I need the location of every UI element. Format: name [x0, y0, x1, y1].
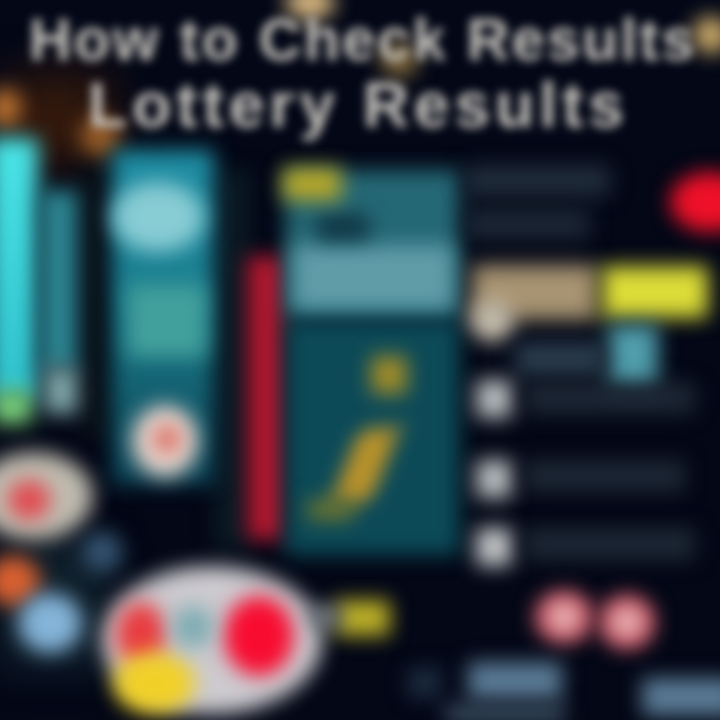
chart dark notch [317, 214, 369, 240]
list row 2 icon [476, 460, 512, 498]
list row 2 text [525, 460, 685, 492]
dot: orange [0, 556, 40, 606]
decorative spark: between title lines [380, 42, 418, 78]
pink dot right [598, 594, 656, 650]
column highlight [112, 182, 204, 252]
donut red centre [8, 480, 50, 520]
tan band light spot [470, 300, 514, 342]
pink dot left [534, 590, 594, 644]
chart upper area [285, 170, 460, 320]
red bar [247, 256, 285, 540]
decorative spark: under title [80, 116, 120, 156]
title: How to Check Results [29, 7, 697, 73]
chart marker [371, 356, 407, 394]
text block: top right second line [465, 208, 590, 240]
cyan bar base [0, 390, 32, 424]
chart light band [293, 245, 453, 310]
panel: teal column [112, 150, 214, 485]
chart lower area [285, 320, 460, 555]
chart curve [330, 428, 400, 504]
text block: top right [465, 165, 610, 197]
caption: bottom small [408, 668, 442, 698]
decorative spark: top [285, 0, 335, 20]
donut: left [0, 452, 93, 540]
background glow: top left [0, 75, 110, 165]
pie red right [224, 596, 294, 676]
column mid block [128, 285, 206, 357]
pie yellow [113, 652, 195, 714]
caption: bottom middle [468, 662, 562, 700]
background haze: lower left [0, 540, 110, 670]
teal bar base [44, 368, 78, 414]
connector [310, 606, 340, 628]
pie red left [116, 602, 166, 668]
decorative spark: left [0, 88, 22, 128]
list row 3 text [525, 528, 695, 560]
dot: small blue [82, 532, 122, 572]
row band [515, 342, 605, 376]
tan band [472, 265, 597, 320]
icon: small pie [132, 405, 198, 477]
background haze: centre gap [215, 170, 250, 550]
caption: bottom right [642, 678, 720, 716]
yellow pie tag [336, 600, 390, 636]
dot: light blue [18, 593, 82, 653]
subtitle: Lottery Results [88, 69, 629, 141]
pink dot left highlight [550, 603, 578, 631]
panel: main chart [267, 152, 473, 566]
caption: bottom tail [445, 704, 565, 720]
list row 3 icon [476, 528, 512, 566]
yellow tag [283, 168, 341, 200]
panel: teal bar [40, 190, 78, 370]
pie centre [172, 606, 214, 648]
decorative spark: top right [692, 16, 720, 54]
pink dot right highlight [613, 608, 641, 636]
yellow highlight [602, 266, 708, 318]
chart curve tail [307, 500, 353, 520]
blue block [608, 325, 658, 391]
red badge [670, 172, 720, 232]
panel: cyan bar [0, 138, 38, 400]
pie chart [102, 566, 322, 714]
background haze: left gap [80, 160, 110, 440]
list row 1 text [525, 382, 695, 414]
list row 1 icon [476, 380, 512, 418]
icon: small pie centre [153, 425, 181, 453]
